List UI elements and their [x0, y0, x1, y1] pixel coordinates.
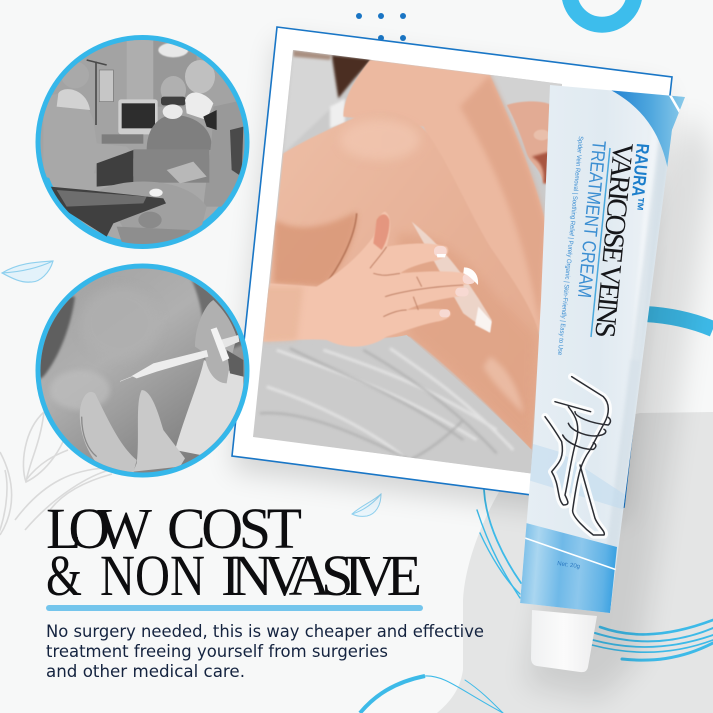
- fingernails: [434, 246, 475, 317]
- knee highlight: [343, 122, 418, 159]
- body line 2: treatment freeing yourself from surgeries: [46, 642, 388, 662]
- body text: [46, 622, 484, 682]
- body line 3: and other medical care.: [46, 662, 245, 682]
- brand name: RAURA™: [627, 143, 653, 212]
- title line 1: [46, 496, 302, 561]
- pillow: [285, 58, 338, 150]
- title: [46, 496, 422, 608]
- pale blue wedge: [528, 443, 630, 510]
- cream tube: [520, 85, 685, 672]
- corner blue swoosh: [611, 90, 685, 168]
- calf shading: [397, 233, 537, 450]
- title line 1: LOW: [46, 496, 152, 561]
- product type: TREATMENT CREAM: [573, 140, 609, 299]
- instrument tray: [50, 187, 166, 237]
- frame shadow: [232, 40, 665, 520]
- decorative dots: [356, 13, 406, 41]
- drape: [133, 149, 209, 183]
- title line 2: [46, 543, 422, 608]
- patient: [112, 182, 203, 234]
- tube shadow: [525, 110, 713, 700]
- net weight: Net: 20g: [557, 561, 580, 570]
- cream streak: [412, 222, 492, 333]
- center surgeon: [147, 115, 212, 150]
- bright background lower right: [175, 360, 243, 463]
- dark upper corner: [40, 296, 76, 380]
- right hand: [507, 101, 553, 183]
- left surgeon: [43, 95, 52, 178]
- title underline: [46, 605, 423, 611]
- background gray blob: [437, 412, 713, 713]
- title line 2: NON: [100, 543, 205, 608]
- product benefits: Spider Vein Removal | Soothing Relief | Purely Organic | Skin-Friendly | Easy to Use: [556, 136, 584, 356]
- blue leaf center: [352, 494, 381, 516]
- cream blob: [463, 267, 478, 285]
- brush arcs lower right: [600, 620, 713, 634]
- shading behind knee: [273, 212, 357, 287]
- back leg: [343, 60, 547, 333]
- forearm and hand: [263, 212, 471, 347]
- dark gap: [332, 55, 372, 98]
- legs icon: [545, 377, 610, 535]
- brush arcs lower left of tube: [477, 490, 521, 598]
- photo frame: [232, 27, 672, 507]
- glove right: [195, 300, 237, 383]
- product name: VARICOSE VEINS: [588, 141, 639, 339]
- lower blue band: [520, 523, 617, 614]
- title line 1: COST: [167, 496, 302, 561]
- background sheet top right: [501, 76, 502, 77]
- monitor: [118, 99, 158, 134]
- brush arc bottom: [360, 676, 425, 713]
- circle photo: surgery: [33, 33, 253, 247]
- right surgeon: [203, 100, 247, 207]
- tube body: [520, 85, 685, 613]
- crimp shadow: [528, 606, 606, 614]
- decorative ring top right: [569, 0, 635, 25]
- brush stroke right: [645, 314, 713, 329]
- blue leaf left: [2, 261, 53, 282]
- tube cap: [531, 610, 597, 672]
- finger creases: [370, 247, 463, 317]
- tube highlight stripes: [644, 130, 658, 242]
- highlight on calf: [483, 357, 523, 413]
- IV drip: [95, 62, 97, 125]
- gloves bottom: [80, 392, 137, 473]
- title line 2: &: [46, 543, 82, 608]
- wall: [40, 40, 244, 173]
- brush arcs: [360, 314, 713, 713]
- syringe: [132, 350, 208, 378]
- gray leaves decoration: [0, 412, 112, 540]
- front thigh and knee: [270, 111, 540, 450]
- circle photo: injection: [33, 263, 253, 483]
- title line 2: INVASIVE: [221, 543, 422, 608]
- product divider: [591, 148, 610, 337]
- sheet foreground: [392, 335, 532, 474]
- photo: cream application on leg: [253, 50, 562, 474]
- body line 1: No surgery needed, this is way cheaper and effective: [46, 622, 484, 642]
- thigh highlight: [80, 287, 160, 360]
